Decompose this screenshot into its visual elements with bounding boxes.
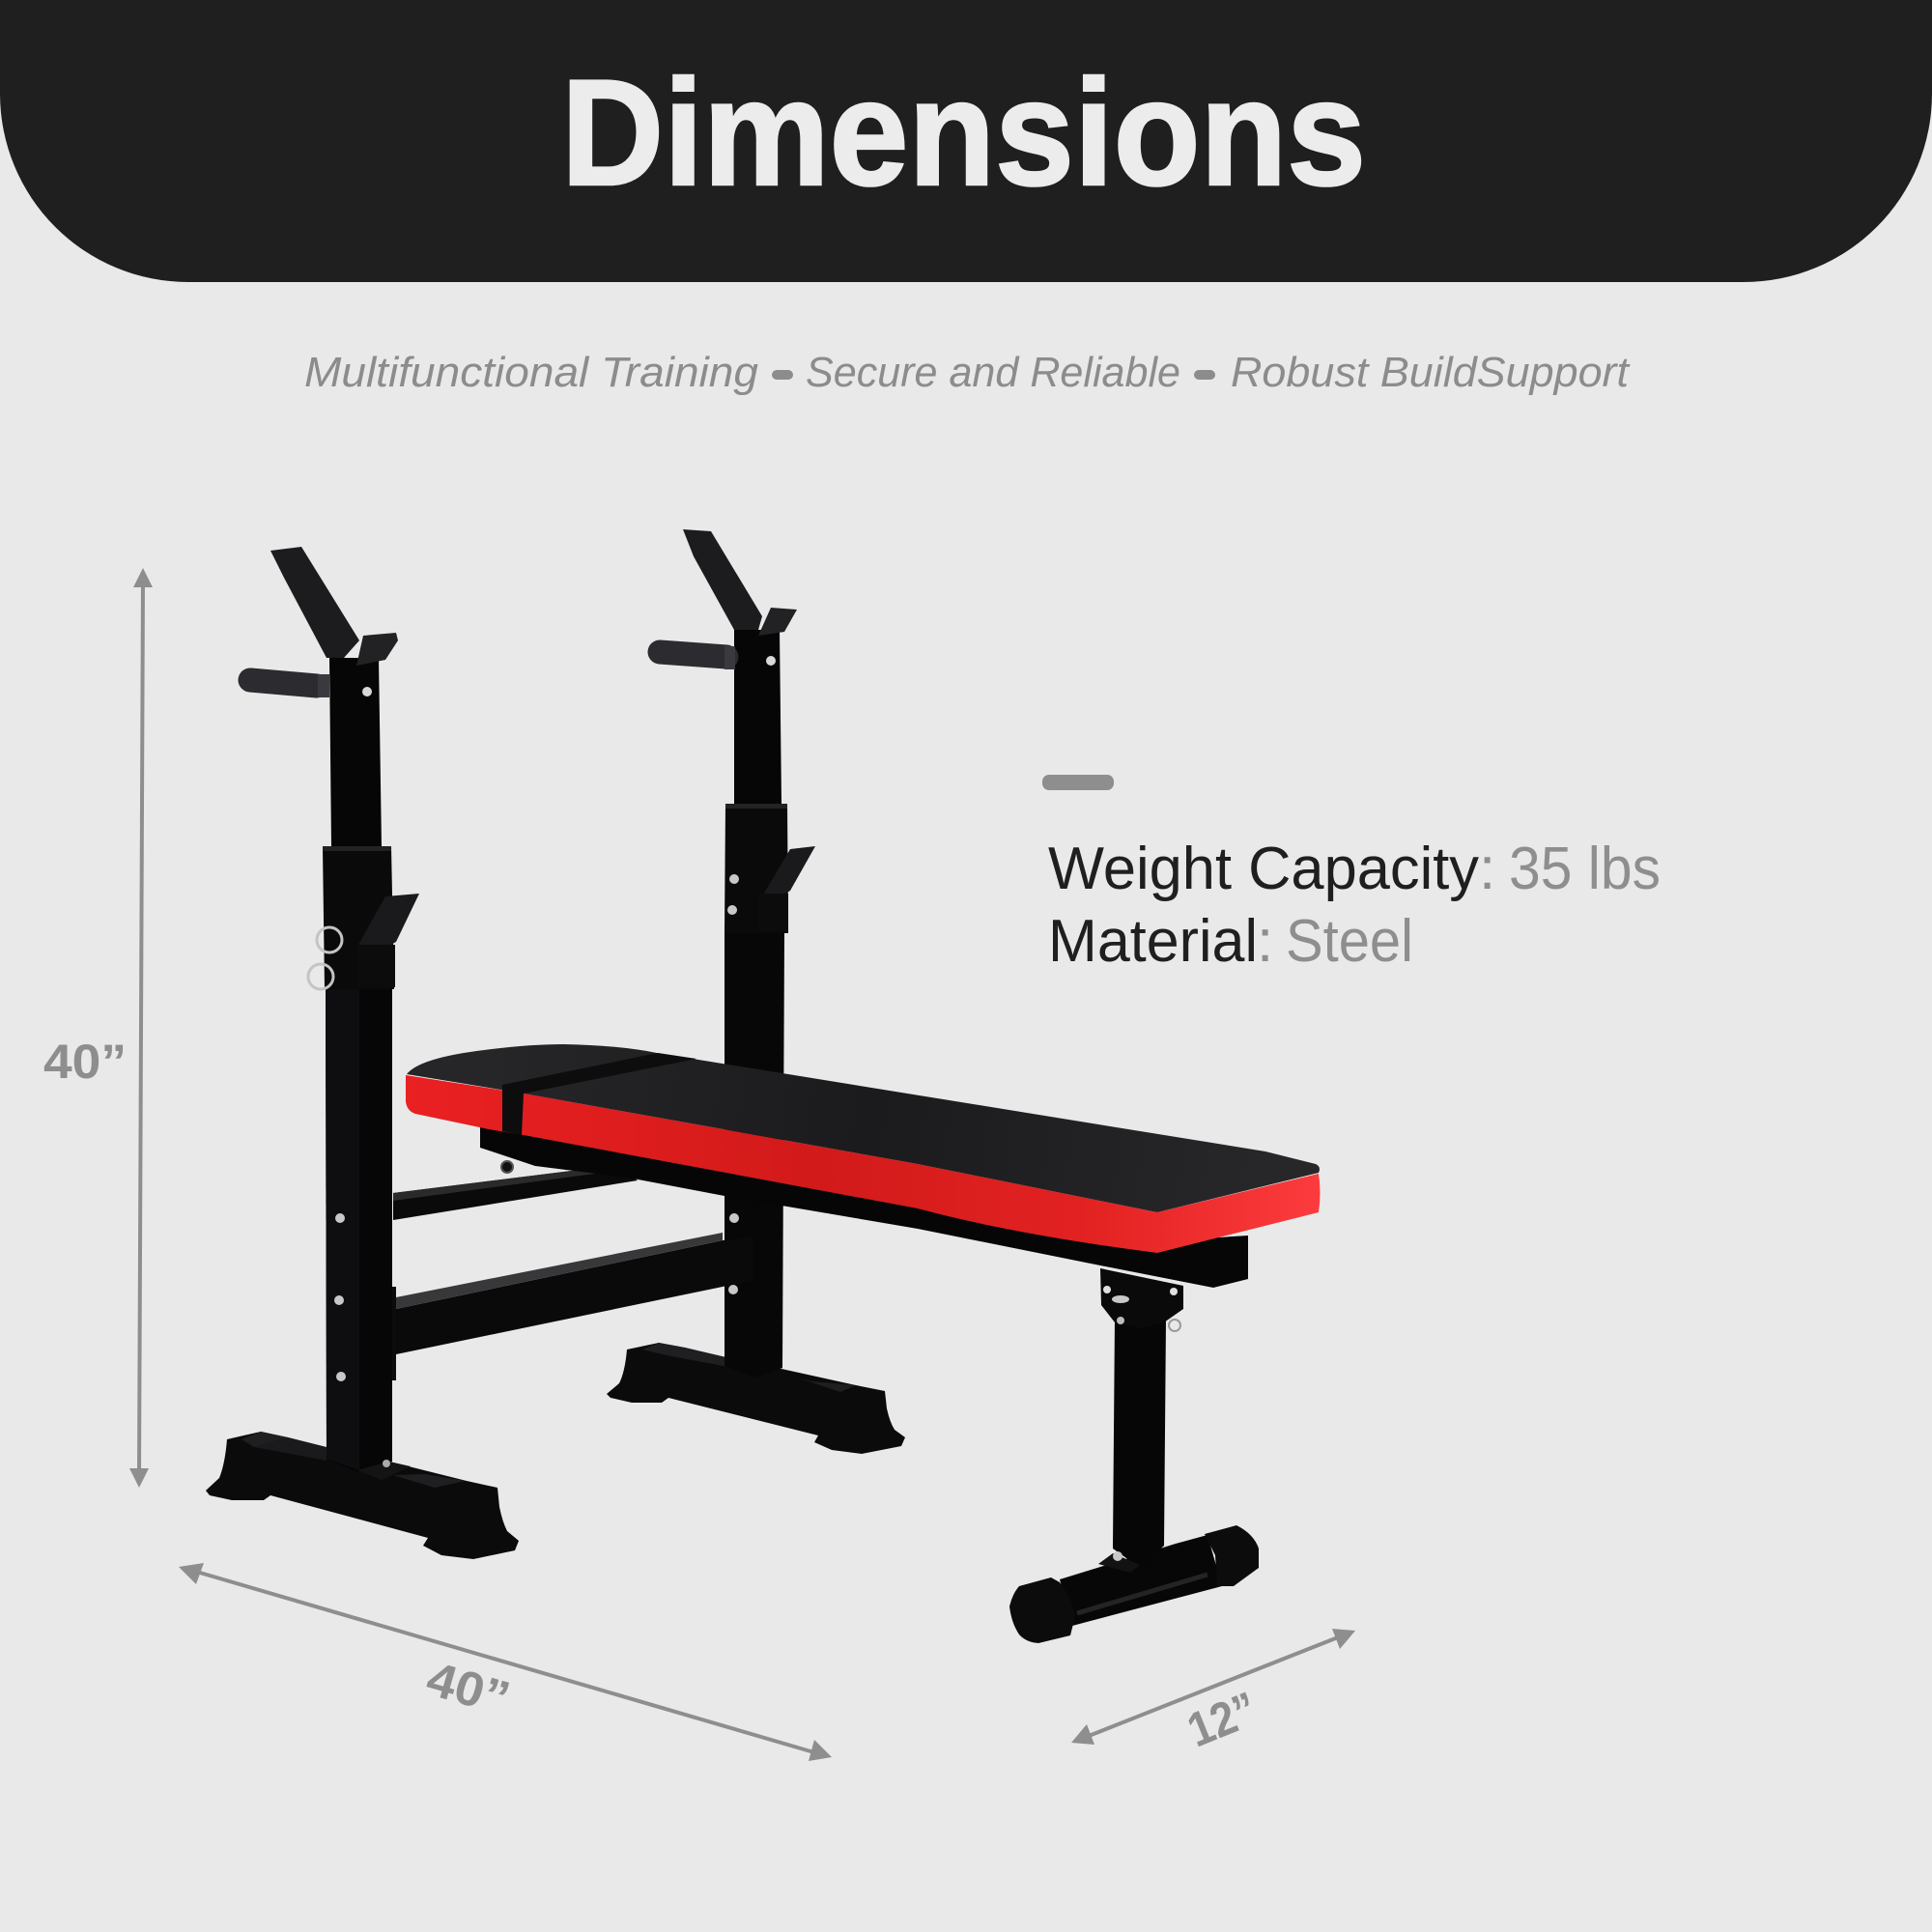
back peg: [660, 652, 726, 657]
seat red side: [406, 1075, 1320, 1253]
front foot: [206, 1432, 519, 1559]
front bolts: [362, 687, 372, 696]
subtitle features: [304, 349, 1631, 396]
leg post: [1113, 1319, 1166, 1568]
subtitle features: Robust BuildSupport: [1231, 349, 1631, 396]
specs text: 35 lbs: [1509, 836, 1661, 902]
crossbars: [386, 1165, 753, 1380]
left cap: [1009, 1577, 1075, 1643]
specs text: :: [1479, 836, 1495, 902]
length arrow: [179, 1563, 832, 1761]
subtitle features: Multifunctional Training: [304, 349, 759, 396]
back bolts: [766, 656, 776, 666]
foot tube: [1060, 1535, 1222, 1626]
front upright: [206, 547, 519, 1559]
upper crossbar: [393, 1165, 638, 1220]
specs text: :: [1257, 908, 1273, 975]
seat black top: [407, 1044, 1320, 1212]
seat strap: [502, 1053, 696, 1135]
pin rings: [317, 927, 342, 952]
specs text: Material: [1048, 908, 1258, 975]
front peg: [250, 680, 317, 686]
front post: [326, 989, 392, 1472]
front hook: [357, 894, 419, 952]
specs text: [1048, 836, 1661, 975]
header banner: [0, 0, 1932, 282]
back short arm: [758, 608, 797, 636]
back upright: [607, 529, 905, 1454]
hanging tab: [501, 1161, 513, 1173]
back long arm: [683, 529, 762, 630]
subtitle features: Secure and Reliable: [806, 349, 1180, 396]
height arrow: [129, 568, 153, 1488]
specs dash: [1042, 775, 1114, 790]
title: Dimensions: [561, 49, 1366, 217]
length label: 40”: [421, 1651, 516, 1726]
specs text: Steel: [1286, 908, 1413, 975]
leg plate: [1100, 1268, 1183, 1328]
seat frame: [480, 1121, 1248, 1288]
width arrow: [1071, 1629, 1355, 1745]
back hook: [762, 846, 815, 898]
width label: 12”: [1180, 1681, 1264, 1757]
lower crossbar: [396, 1236, 753, 1354]
front short arm: [356, 633, 398, 666]
specs text: Weight Capacity: [1048, 836, 1479, 902]
back post: [724, 933, 784, 1378]
front leg: [1009, 1268, 1259, 1643]
foot bolt: [357, 1462, 411, 1480]
product: weight bench: [206, 529, 1320, 1643]
back foot: [607, 1343, 905, 1454]
height label: 40”: [43, 1035, 127, 1089]
front long arm: [270, 547, 359, 658]
tube bracket: [1098, 1553, 1140, 1573]
right cap: [1205, 1525, 1259, 1586]
